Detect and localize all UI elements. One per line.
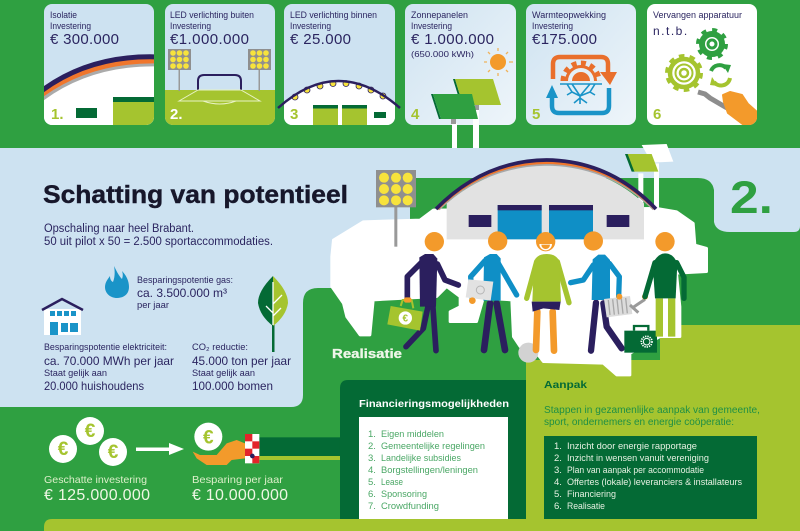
text: gas savings bbox=[137, 275, 233, 310]
label: Realisatie: Realisatie bbox=[332, 347, 402, 361]
hand with coin and checkered sleeve bbox=[193, 423, 340, 465]
panel: financing options: Crowdfunding bbox=[381, 501, 439, 512]
person 4 with paper and hammer bbox=[571, 231, 648, 351]
bottom lime band bbox=[44, 519, 800, 531]
card 3: LED verlichting binnen bbox=[278, 4, 400, 125]
person 2 with plan bbox=[466, 231, 517, 350]
title: Schatting van potentieel bbox=[43, 181, 348, 209]
panel: financing options: Sponsoring bbox=[381, 489, 427, 500]
card 4: zonnepanelen: Zonnepanelen bbox=[411, 10, 468, 20]
card 5: warmteopwekking: Warmteopwekking bbox=[532, 10, 606, 20]
arrow bbox=[136, 443, 184, 455]
panel: approach steps: Inzicht in wensen vanuit vereniging bbox=[567, 453, 709, 464]
card 2: LED verlichting buiten: €1.000.000 bbox=[170, 31, 249, 48]
panel: approach steps: Financiering bbox=[567, 489, 616, 500]
intro text: Opschaling naar heel Brabant. bbox=[44, 223, 194, 235]
panel: financing options: Lease bbox=[381, 477, 403, 488]
panel: financing options: 1. bbox=[368, 429, 376, 440]
panel: approach steps: Offertes (lokale) leveranciers & installateurs bbox=[567, 477, 742, 488]
text: annual saving: Besparing per jaar bbox=[192, 474, 284, 486]
text: CO2 reduction: Staat gelijk aan bbox=[192, 368, 255, 378]
panel: financing options: Financieringsmogelijkheden bbox=[359, 398, 509, 410]
panel: approach steps: 1. bbox=[554, 441, 562, 452]
building bbox=[436, 160, 656, 239]
coins: € bbox=[85, 421, 96, 442]
text: gas savings: Besparingspotentie gas: bbox=[137, 275, 233, 285]
coins: € bbox=[108, 442, 119, 463]
panel: financing options: Landelijke subsidies bbox=[381, 453, 461, 464]
panel: approach steps: 5. bbox=[554, 489, 562, 500]
background: lime field bbox=[526, 325, 800, 531]
card 3: LED verlichting binnen: 3 bbox=[290, 106, 298, 123]
panel: financing options bbox=[340, 380, 526, 519]
card 2: LED verlichting buiten: LED verlichting buiten bbox=[170, 10, 254, 20]
text: electricity savings: 20.000 huishoudens bbox=[44, 379, 144, 393]
card 1: isolatie: 1. bbox=[51, 106, 64, 123]
panel: approach steps bbox=[544, 436, 757, 519]
card 4: zonnepanelen: 4 bbox=[411, 106, 420, 123]
card 2: LED verlichting buiten bbox=[165, 4, 275, 125]
card 6: vervangen apparatuur: Vervangen apparatuur bbox=[653, 10, 742, 20]
text: electricity savings: Staat gelijk aan bbox=[44, 368, 107, 378]
card 5: warmteopwekking: €175.000 bbox=[532, 31, 597, 48]
panel: financing options: 5. bbox=[368, 477, 376, 488]
card 2: LED verlichting buiten: Investering bbox=[170, 21, 211, 31]
text: annual saving bbox=[192, 474, 288, 504]
card 4: zonnepanelen bbox=[405, 4, 516, 148]
panel: approach steps: Realisatie bbox=[567, 501, 605, 512]
panel: approach steps: 3. bbox=[554, 465, 562, 476]
coins bbox=[49, 417, 127, 466]
panel: financing options: 3. bbox=[368, 453, 376, 464]
text: approach intro: sport, ondernemers en energie coöperatie: bbox=[544, 417, 734, 428]
panel: financing options: 4. bbox=[368, 465, 376, 476]
scene: sports accommodation with people bbox=[332, 144, 707, 375]
card 2: LED verlichting buiten: 2. bbox=[170, 106, 183, 123]
ball bbox=[518, 343, 538, 363]
card 4: zonnepanelen: (650.000 kWh) bbox=[411, 50, 474, 59]
card 1: isolatie: Investering bbox=[50, 21, 91, 31]
card 5: warmteopwekking: 5 bbox=[532, 106, 540, 123]
text: gas savings: ca. 3.500.000 m³ bbox=[137, 286, 227, 300]
text: annual saving: € 10.000.000 bbox=[192, 487, 288, 504]
panel: financing options: Borgstellingen/leningen bbox=[381, 465, 478, 476]
icon: house bbox=[42, 299, 83, 335]
panel: approach steps: 6. bbox=[554, 501, 562, 512]
text: approach intro: Stappen in gezamenlijke aanpak van gemeente, bbox=[544, 405, 760, 416]
card 3: LED verlichting binnen: Investering bbox=[290, 21, 331, 31]
panel: approach steps: Inzicht door energie rapportage bbox=[567, 441, 697, 452]
text: CO2 reduction bbox=[192, 342, 291, 393]
text: estimated investment bbox=[44, 474, 150, 504]
text: electricity savings: Besparingspotentie elektriciteit: bbox=[44, 342, 167, 352]
panel: financing options: 7. bbox=[368, 501, 376, 512]
text: estimated investment: Geschatte investering bbox=[44, 474, 147, 486]
panel: approach steps: Plan van aanpak per accommodatie bbox=[567, 465, 704, 476]
panel: financing options: 2. bbox=[368, 441, 376, 452]
toolbox bbox=[624, 326, 657, 353]
floodlight bbox=[376, 170, 416, 247]
person 5 bbox=[645, 232, 684, 337]
section number: 2. bbox=[730, 172, 773, 223]
rooftop solar panels bbox=[625, 144, 673, 208]
text: electricity savings: ca. 70.000 MWh per jaar bbox=[44, 354, 174, 368]
icon: gas flame bbox=[105, 266, 129, 298]
text: estimated investment: € 125.000.000 bbox=[44, 487, 150, 504]
panel: financing options: Eigen middelen bbox=[381, 429, 444, 440]
panel: financing options: 6. bbox=[368, 489, 376, 500]
card 5: warmteopwekking: Investering bbox=[532, 21, 573, 31]
card 1: isolatie bbox=[40, 4, 160, 125]
text: CO2 reduction: 100.000 bomen bbox=[192, 379, 273, 393]
card 3: LED verlichting binnen: LED verlichting binnen bbox=[290, 10, 377, 20]
text: CO2 reduction: 45.000 ton per jaar bbox=[192, 354, 291, 368]
card 6: vervangen apparatuur: 6 bbox=[653, 106, 661, 123]
card 1: isolatie: € 300.000 bbox=[50, 31, 119, 48]
panel: approach steps: 4. bbox=[554, 477, 562, 488]
person 1 with money bag: € bbox=[403, 314, 409, 325]
person 1 with money bag bbox=[387, 232, 458, 351]
card 4: zonnepanelen: Investering bbox=[411, 21, 452, 31]
intro text: 50 uit pilot x 50 = 2.500 sportaccommodaties. bbox=[44, 236, 273, 248]
coins: € bbox=[58, 439, 69, 460]
text: gas savings: per jaar bbox=[137, 300, 169, 310]
background: light blue section bbox=[0, 148, 800, 407]
card 6: vervangen apparatuur: n.t.b. bbox=[653, 24, 689, 38]
card 1: isolatie: Isolatie bbox=[50, 10, 77, 20]
panel: financing options: Gemeentelijke regelingen bbox=[381, 441, 485, 452]
text: electricity savings bbox=[44, 342, 174, 393]
heading: Aanpak: Aanpak bbox=[544, 379, 587, 391]
hand with coin and checkered sleeve: € bbox=[203, 427, 214, 448]
card 3: LED verlichting binnen: € 25.000 bbox=[290, 31, 351, 48]
card 4: zonnepanelen: € 1.000.000 bbox=[411, 31, 494, 48]
icon: leaf bbox=[258, 276, 288, 352]
card 5: warmteopwekking bbox=[526, 4, 636, 125]
person 3 smiling bbox=[527, 232, 569, 351]
text: CO2 reduction: CO₂ reductie: bbox=[192, 342, 248, 352]
text: approach intro bbox=[544, 405, 760, 428]
intro text bbox=[44, 223, 273, 248]
card 6: vervangen apparatuur bbox=[647, 4, 757, 125]
panel: approach steps: 2. bbox=[554, 453, 562, 464]
